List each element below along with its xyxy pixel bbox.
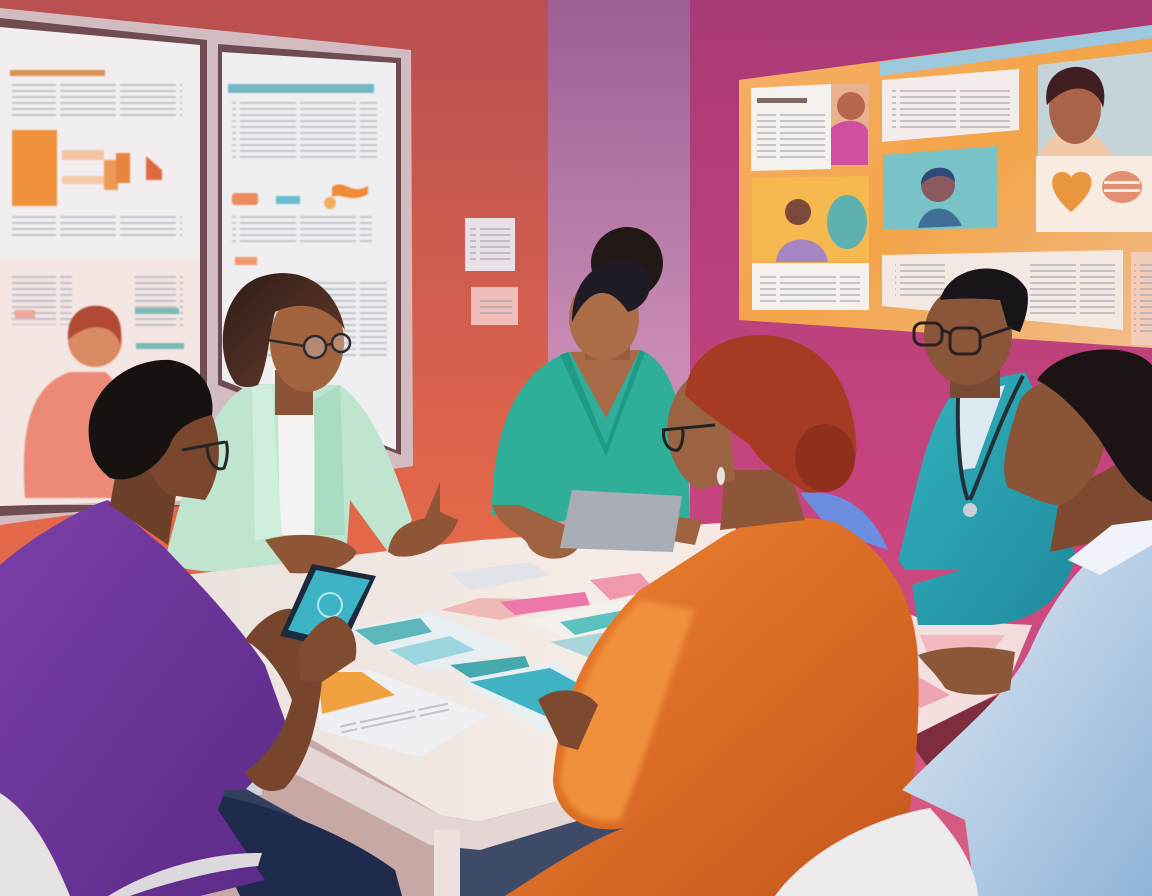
wall note: paper xyxy=(465,218,515,271)
orange dress xyxy=(505,518,919,896)
earring xyxy=(717,467,725,485)
wall note: pink sticky xyxy=(471,287,518,325)
panel: right edge text xyxy=(1131,252,1152,345)
stethoscope xyxy=(958,376,1023,500)
collar xyxy=(1068,520,1152,575)
table xyxy=(182,522,1032,896)
chair: front right xyxy=(775,808,978,896)
chair: front left xyxy=(0,793,70,896)
hair xyxy=(89,360,213,479)
forearm and rear hand xyxy=(245,609,322,791)
phone xyxy=(280,564,376,650)
poster content: center xyxy=(228,84,387,360)
glasses xyxy=(182,441,227,469)
person: woman in mint cardigan xyxy=(165,273,412,575)
hair xyxy=(1037,349,1152,502)
person: woman in teal top xyxy=(492,227,690,530)
poster figure: woman in pink xyxy=(24,306,124,498)
hand xyxy=(538,690,598,750)
person: man in teal scrubs xyxy=(898,268,1075,625)
panel: lower center text xyxy=(882,250,1123,330)
table documents xyxy=(315,562,1005,757)
panel: top left text and figure xyxy=(751,84,869,171)
blue chair back xyxy=(800,492,888,550)
wall: left coral xyxy=(0,0,548,896)
shirt xyxy=(0,500,292,896)
wall poster: right display xyxy=(739,25,1152,348)
person: man in white coat xyxy=(902,349,1152,896)
arms and hands: woman in teal xyxy=(492,505,702,559)
neck and face xyxy=(270,292,344,415)
wall poster: left window frame xyxy=(0,8,413,525)
wall: right magenta xyxy=(690,0,1152,896)
chair arm: left xyxy=(108,853,262,896)
neck xyxy=(1050,465,1152,552)
panel: portrait xyxy=(1038,52,1152,156)
neck and head xyxy=(110,400,219,545)
panel: yellow figures xyxy=(752,176,869,262)
hair bun xyxy=(591,227,663,299)
neck and face xyxy=(668,371,805,530)
tablet xyxy=(560,490,682,552)
glasses xyxy=(268,334,350,358)
poster content: left chart xyxy=(10,70,184,349)
glasses xyxy=(662,425,715,450)
hand xyxy=(918,647,1015,695)
wall: center lilac xyxy=(548,0,690,896)
coat xyxy=(902,522,1152,896)
panel: teal portrait xyxy=(883,146,997,230)
sleeve highlight xyxy=(560,600,695,821)
person: man in purple shirt xyxy=(0,360,402,896)
panel: top center text xyxy=(882,69,1019,142)
dark trousers xyxy=(190,790,402,896)
front hand xyxy=(298,616,356,682)
panel: heart card xyxy=(1036,156,1152,232)
glasses xyxy=(914,323,1012,354)
floor xyxy=(160,690,1010,896)
face xyxy=(1004,381,1106,505)
hair xyxy=(223,273,345,387)
panel: lower left text xyxy=(752,263,869,310)
person: woman in orange xyxy=(505,335,919,896)
hair xyxy=(685,335,856,493)
hands: woman in mint on table xyxy=(265,482,458,573)
